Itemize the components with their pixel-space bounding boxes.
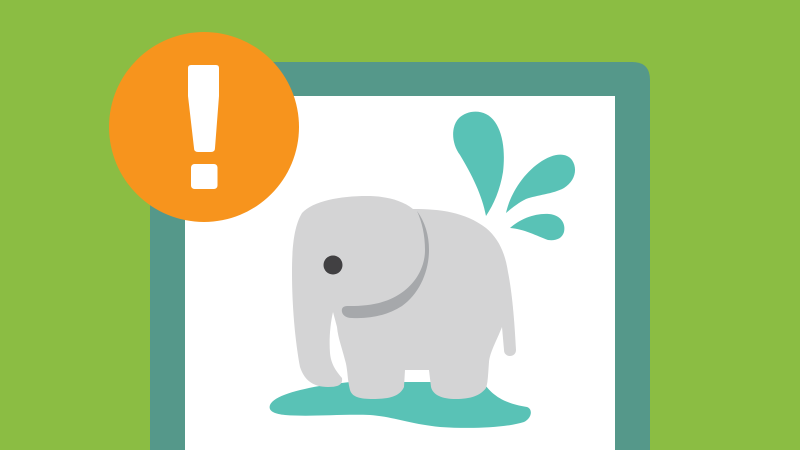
puddle (270, 382, 531, 428)
exclamation mark (188, 65, 219, 189)
elephant body (292, 196, 516, 399)
elephant ear shadow (342, 211, 429, 318)
elephant (292, 196, 516, 399)
orange circle (109, 32, 299, 222)
warning badge (109, 32, 299, 222)
water drop: small (510, 214, 564, 240)
water drop: middle (506, 155, 575, 213)
picture frame (150, 62, 650, 450)
elephant eye (324, 256, 342, 274)
water drop: large (453, 112, 504, 216)
